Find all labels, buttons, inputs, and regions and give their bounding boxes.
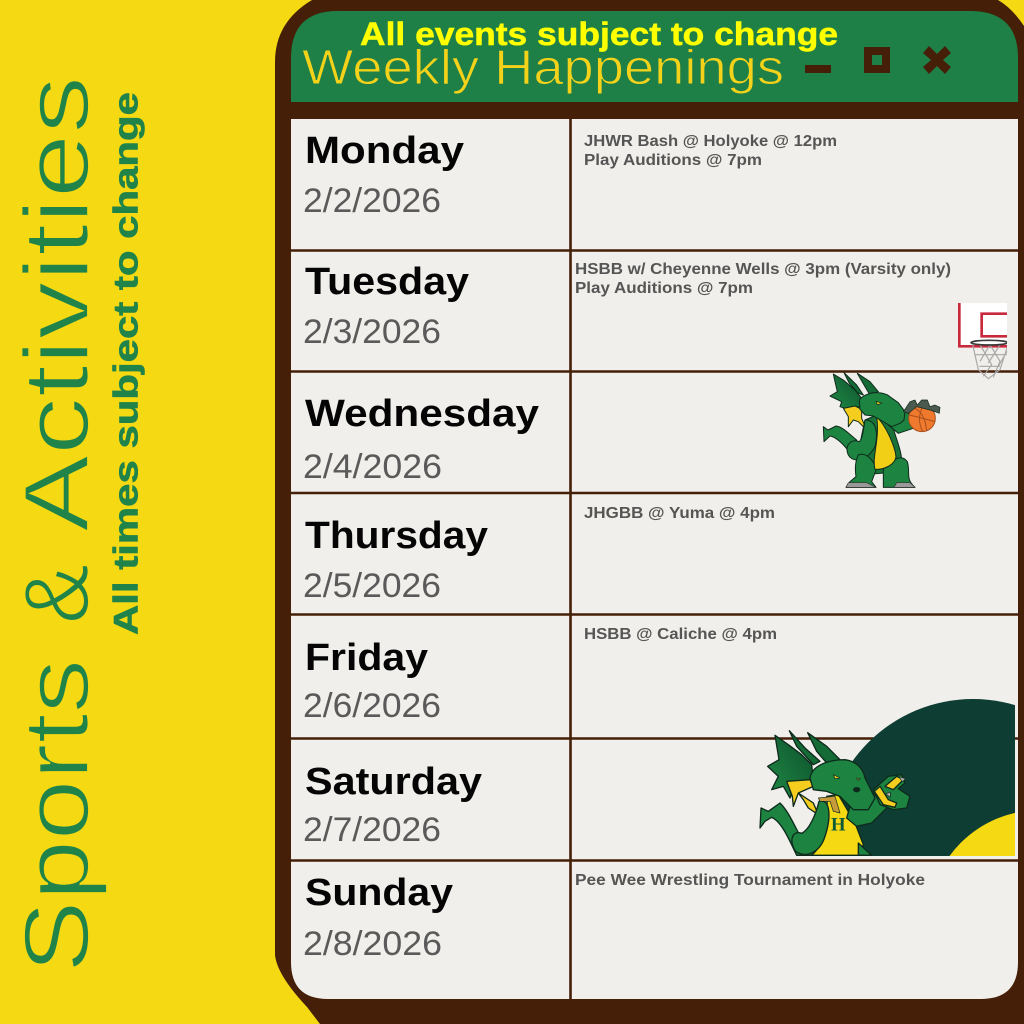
row: Tuesday	[303, 261, 951, 351]
icon: minimize	[805, 65, 831, 73]
row: Thursday: 2/5/2026	[303, 567, 441, 605]
row: Friday: Friday	[305, 637, 428, 679]
title: Sports & Activities: Sports	[6, 659, 108, 973]
row: Monday: JHWR Bash @ Holyoke @ 12pm	[584, 133, 837, 150]
row: Thursday	[303, 505, 775, 605]
row: Monday: 2/2/2026	[303, 182, 441, 220]
row: Monday: Monday	[305, 130, 464, 172]
row: Saturday	[303, 761, 482, 849]
title: Sports & Activities	[6, 76, 108, 973]
icon: basketball hoop	[958, 303, 1017, 379]
title: Sports & Activities: Activities	[6, 76, 108, 532]
row: Wednesday	[303, 393, 539, 486]
row: Wednesday: 2/4/2026	[303, 448, 442, 486]
title: Sports & Activities: &	[6, 564, 108, 624]
heading: Weekly Happenings: Weekly Happenings	[302, 41, 784, 95]
jersey letter H: H	[831, 815, 846, 836]
row: Saturday: Saturday	[305, 761, 482, 803]
row: Sunday: Pee Wee Wrestling Tournament in Holyoke	[575, 872, 925, 889]
row: Thursday: JHGBB @ Yuma @ 4pm	[584, 505, 775, 522]
schedule table	[291, 119, 1018, 999]
mascot: dragon with basketball	[823, 373, 940, 487]
decorative arc behind mascot	[841, 699, 1015, 856]
row: Wednesday: Wednesday	[305, 393, 539, 435]
row: Sunday: Sunday	[305, 872, 453, 914]
icon: close	[923, 46, 951, 74]
row: Tuesday: Play Auditions @ 7pm	[575, 280, 753, 297]
row: Friday	[303, 626, 777, 725]
row: Thursday: Thursday	[305, 515, 488, 557]
row: Saturday: 2/7/2026	[303, 811, 441, 849]
row: Sunday	[303, 872, 925, 963]
row: Friday: 2/6/2026	[303, 687, 441, 725]
subtitle: All times subject to change: All times subject to change	[108, 92, 146, 635]
notice: all events subject to change: All events subject to change	[360, 16, 838, 52]
row: Friday: HSBB @ Caliche @ 4pm	[584, 626, 777, 643]
icon: maximize	[864, 47, 890, 73]
row: Tuesday: Tuesday	[305, 261, 469, 303]
row: Monday	[303, 130, 837, 220]
row: Monday: Play Auditions @ 7pm	[584, 152, 762, 169]
row: Tuesday: HSBB w/ Cheyenne Wells @ 3pm (Varsity only)	[575, 261, 951, 278]
row: Sunday: 2/8/2026	[303, 925, 442, 963]
window frame	[275, 0, 1024, 1024]
mascot: dragon in jersey pointing	[760, 731, 910, 855]
row: Tuesday: 2/3/2026	[303, 313, 441, 351]
window title bar	[291, 11, 1018, 102]
